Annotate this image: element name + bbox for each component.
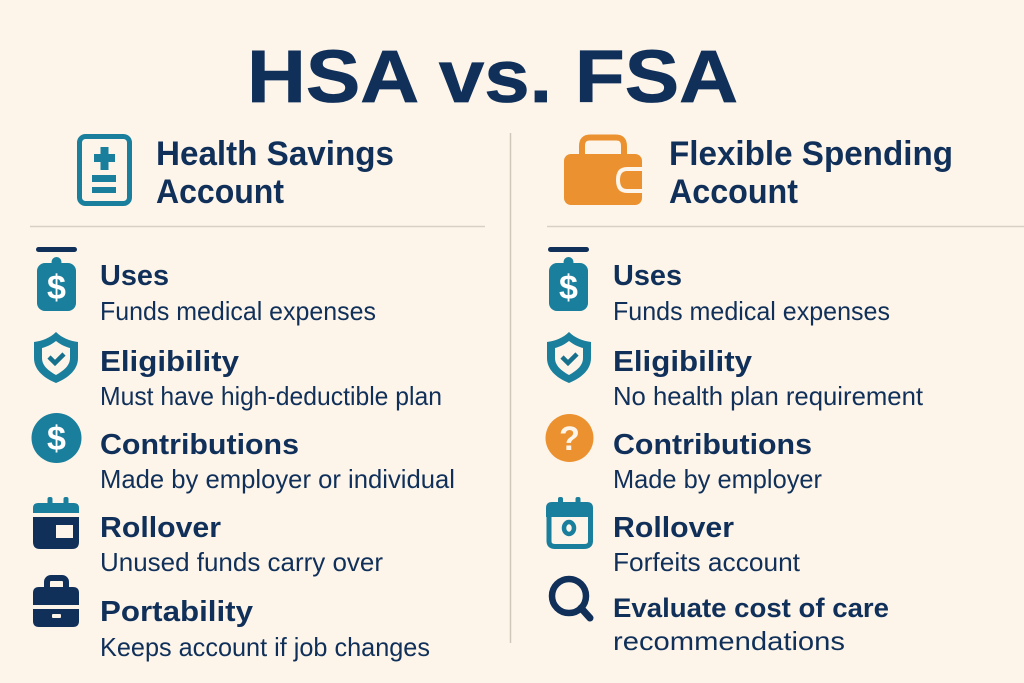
item: rollover: Forfeits account (613, 547, 801, 577)
heading: health savings account: Account (156, 173, 284, 211)
item: contributions: Contributions (100, 429, 299, 461)
item: contributions (613, 429, 822, 494)
title: HSA vs. FSA (247, 35, 738, 118)
heading: flexible spending account (669, 135, 953, 211)
item: contributions: Made by employer (613, 464, 822, 494)
icon: question coin (546, 414, 594, 462)
item: uses: Funds medical expenses (613, 296, 890, 326)
heading: health savings account (156, 135, 394, 211)
item: contributions: Contributions (613, 429, 812, 461)
icon: money bag: $ (47, 269, 66, 307)
icon: dollar coin (32, 413, 82, 463)
item: eligibility (613, 346, 924, 411)
item: uses: Uses (100, 260, 169, 292)
item: eligibility: Eligibility (613, 346, 752, 378)
icon: question coin: ? (559, 420, 580, 458)
item: evaluate cost of care (613, 593, 889, 656)
icon: shield (34, 332, 78, 383)
icon: magnifying glass (552, 579, 590, 618)
item: rollover: Rollover (613, 512, 734, 544)
icon: money bag (36, 247, 77, 311)
item: portability: Keeps account if job changes (100, 632, 430, 662)
item: rollover: Unused funds carry over (100, 547, 383, 577)
panel: flexible spending account (546, 135, 953, 656)
item: portability: Portability (100, 596, 253, 628)
icon: teal calendar (546, 497, 593, 546)
item: eligibility: Eligibility (100, 346, 239, 378)
item: evaluate cost of care: recommendations (613, 626, 845, 656)
icon: shield (547, 332, 591, 383)
item: rollover (613, 512, 801, 577)
item: eligibility: No health plan requirement (613, 381, 924, 411)
heading: health savings account: Health Savings (156, 135, 394, 173)
icon: money bag (548, 247, 589, 311)
icon: briefcase (33, 578, 79, 627)
icon: dollar coin: $ (47, 420, 66, 458)
item: evaluate cost of care: Evaluate cost of care (613, 593, 889, 623)
icon: money bag: $ (559, 269, 578, 307)
icon: orange wallet (564, 138, 642, 205)
item: contributions (100, 429, 455, 494)
item: rollover (100, 512, 383, 577)
icon: medical document (80, 136, 130, 204)
item: uses: Funds medical expenses (100, 296, 376, 326)
item: eligibility (100, 346, 442, 411)
item: rollover: Rollover (100, 512, 221, 544)
item: uses: Uses (613, 260, 682, 292)
icon: calendar (33, 497, 79, 549)
item: uses (100, 260, 376, 326)
item: uses (613, 260, 890, 326)
heading: flexible spending account: Flexible Spending (669, 135, 953, 173)
item: portability (100, 596, 430, 662)
panel: health savings account (32, 135, 455, 662)
heading: flexible spending account: Account (669, 173, 798, 211)
item: eligibility: Must have high-deductible plan (100, 381, 442, 411)
item: contributions: Made by employer or individual (100, 464, 455, 494)
